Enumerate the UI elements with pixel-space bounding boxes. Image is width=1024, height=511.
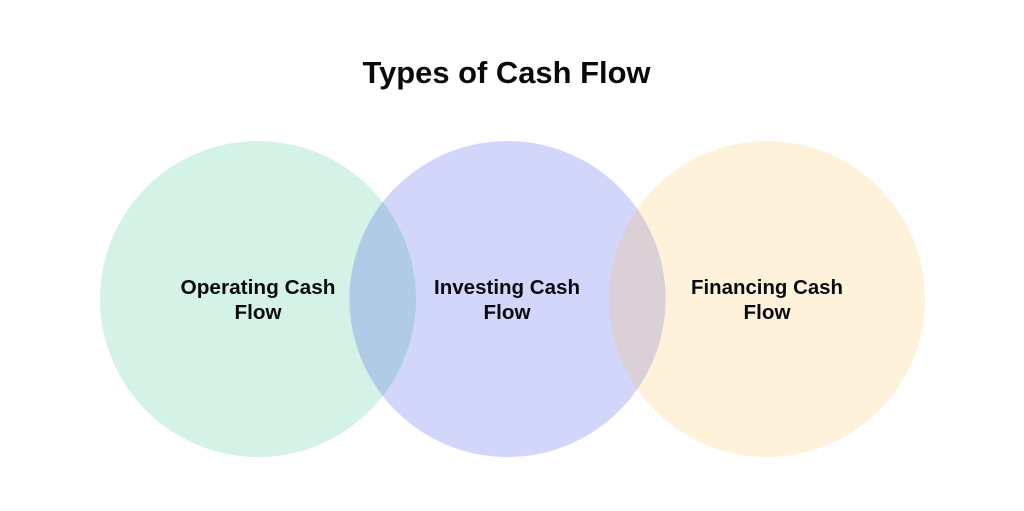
circle: operating cash flow <box>100 141 416 457</box>
infographic: types of cash flow <box>100 61 925 457</box>
circle: financing cash flow <box>609 141 925 457</box>
label: investing cash flow: Investing Cash <box>434 277 580 299</box>
label: financing cash flow: Financing Cash <box>691 277 843 299</box>
label: operating cash flow: Operating Cash <box>180 277 336 299</box>
label: financing cash flow: Flow <box>744 302 791 324</box>
label: investing cash flow <box>434 277 580 324</box>
label: financing cash flow <box>691 277 843 324</box>
overlap: operating and investing <box>350 202 416 396</box>
overlap: investing and financing <box>609 209 666 389</box>
title: Types of Cash Flow <box>362 55 651 90</box>
label: operating cash flow: Flow <box>234 302 282 324</box>
circle: investing cash flow <box>350 141 666 457</box>
label: operating cash flow <box>180 277 336 324</box>
label: investing cash flow: Flow <box>484 302 531 324</box>
